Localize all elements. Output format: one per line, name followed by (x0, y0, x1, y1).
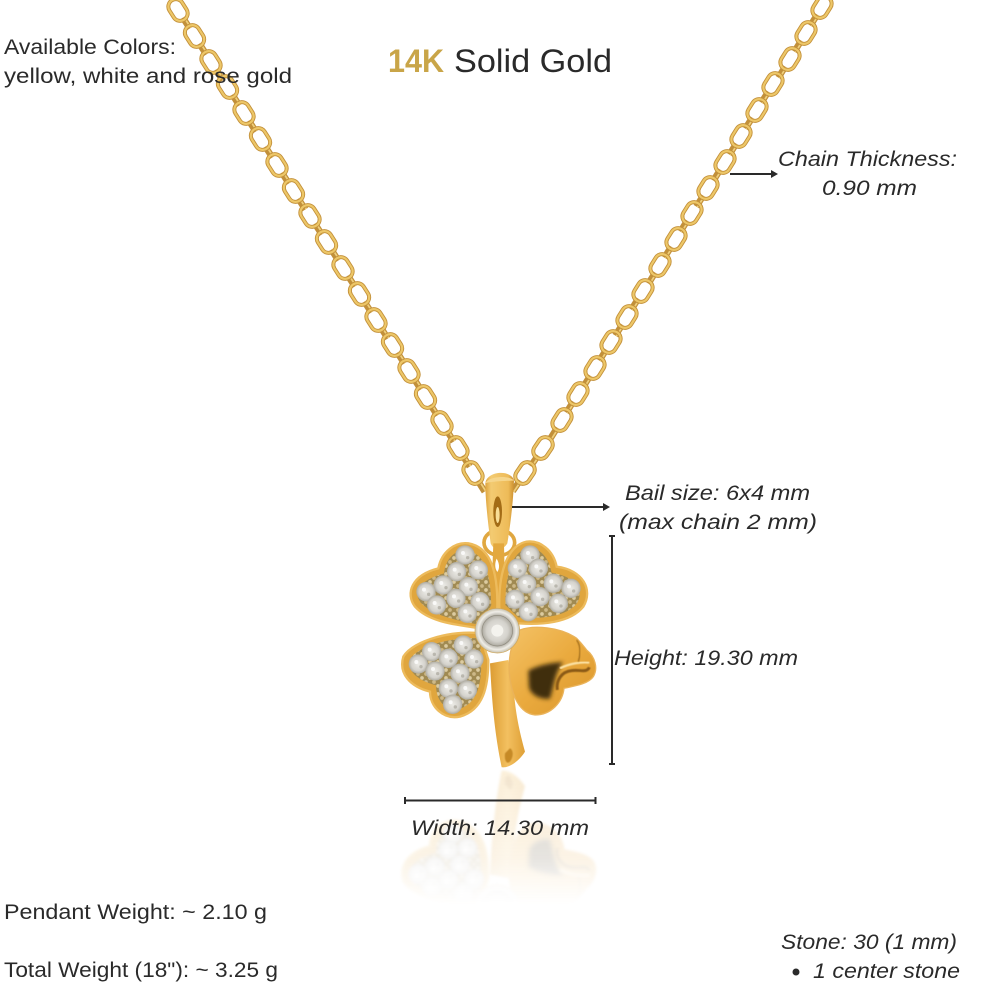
right chain (506, 0, 834, 495)
clover pendant (402, 473, 596, 767)
arrow: chain thickness (730, 170, 778, 178)
pendant reflection (402, 770, 596, 889)
available colors: yellow, white and rose gold (4, 65, 292, 88)
bail (484, 473, 515, 555)
total weight: Total Weight (18"): ~ 3.25 g (4, 959, 278, 982)
available colors (4, 36, 292, 88)
height label: Height: 19.30 mm (614, 647, 798, 670)
bail size label: (max chain 2 mm) (619, 511, 817, 534)
title: 14K: 14K (388, 43, 444, 79)
chain thickness label: 0.90 mm (822, 177, 917, 200)
width label: Width: 14.30 mm (411, 817, 589, 840)
stone details: Stone: 30 (1 mm) (781, 931, 957, 954)
pendant weight: Pendant Weight: ~ 2.10 g (4, 901, 267, 924)
stone details (781, 931, 960, 983)
clover leaves with stones (402, 541, 596, 767)
stone details: 1 center stone (813, 960, 960, 983)
chain thickness label: Chain Thickness: (778, 148, 957, 171)
bail size label: Bail size: 6x4 mm (625, 482, 810, 505)
arrow: bail size (512, 503, 610, 511)
left chain (165, 0, 491, 496)
chain thickness label (778, 148, 957, 200)
width dimension line (405, 797, 596, 804)
bail size label (619, 482, 817, 534)
title text: Solid Gold (454, 43, 612, 79)
height dimension line (609, 536, 615, 764)
available colors: Available Colors: (4, 36, 176, 59)
